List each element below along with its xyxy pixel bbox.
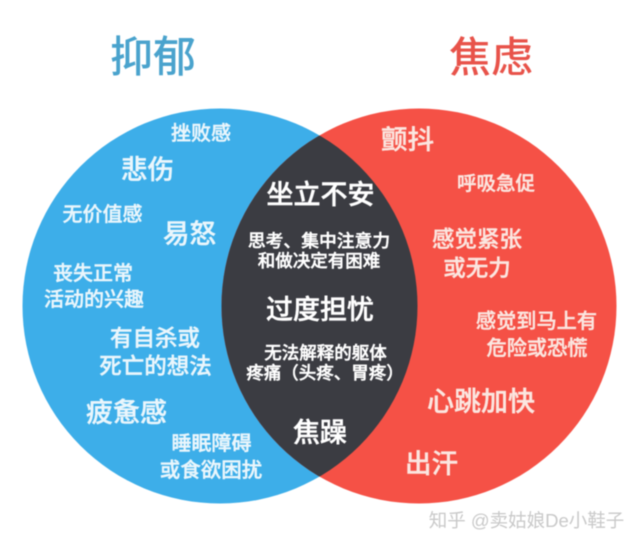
depression symptoms [44, 122, 262, 482]
watermark: 知乎 @卖姑娘De小鞋子 [429, 510, 624, 531]
symptom: tense or powerless: 感觉紧张 [432, 227, 522, 252]
symptom: worthlessness: 无价值感 [62, 203, 142, 226]
circle: anxiety [222, 108, 616, 504]
symptom: sleep or appetite problems: 睡眠障碍 [172, 432, 252, 455]
symptom: sleep or appetite problems: 或食欲困扰 [160, 459, 262, 482]
symptom: excessive worry: 过度担忧 [266, 295, 374, 325]
symptom: suicidal thoughts: 有自杀或 [110, 326, 200, 351]
symptom: sense of danger: 危险或恐慌 [487, 337, 587, 360]
symptom: sleep or appetite problems [160, 432, 262, 482]
overlap: shared symptoms area [220, 135, 418, 477]
symptom: trembling: 颤抖 [381, 125, 434, 155]
anxiety symptoms [381, 125, 597, 479]
shared symptoms [246, 180, 404, 448]
symptom: restlessness: 坐立不安 [266, 180, 374, 210]
symptom: unexplained body pain: 无法解释的躯体 [264, 343, 387, 363]
symptom: suicidal thoughts [99, 326, 212, 379]
symptom: frustration: 挫败感 [171, 122, 231, 145]
symptom: racing heart: 心跳加快 [427, 387, 535, 417]
symptom: agitation: 焦躁 [293, 418, 347, 448]
title: anxiety: 焦虑 [449, 34, 533, 81]
symptom: sense of danger [476, 310, 597, 360]
symptom: unexplained body pain [246, 343, 404, 383]
symptom: trouble concentrating [248, 231, 390, 271]
symptom: loss of interest: 丧失正常 [53, 262, 133, 285]
title: depression: 抑郁 [110, 34, 196, 82]
symptom: suicidal thoughts: 死亡的想法 [99, 354, 212, 379]
symptom: irritability: 易怒 [163, 219, 216, 249]
symptom: sweating: 出汗 [405, 449, 458, 479]
circle: depression [22, 108, 418, 504]
symptom: trouble concentrating: 和做决定有困难 [258, 251, 380, 271]
symptom: sense of danger: 感觉到马上有 [476, 310, 597, 333]
symptom: tense or powerless: 或无力 [443, 256, 511, 281]
symptom: unexplained body pain: 疼痛（头疼、胃疼） [246, 363, 404, 383]
symptom: loss of interest [44, 262, 144, 311]
symptom: sadness: 悲伤 [121, 155, 174, 185]
symptom: trouble concentrating: 思考、集中注意力 [248, 231, 390, 251]
symptom: fatigue: 疲惫感 [86, 398, 167, 428]
symptom: tense or powerless [432, 227, 522, 281]
symptom: shortness of breath: 呼吸急促 [457, 173, 535, 195]
symptom: loss of interest: 活动的兴趣 [44, 288, 144, 311]
